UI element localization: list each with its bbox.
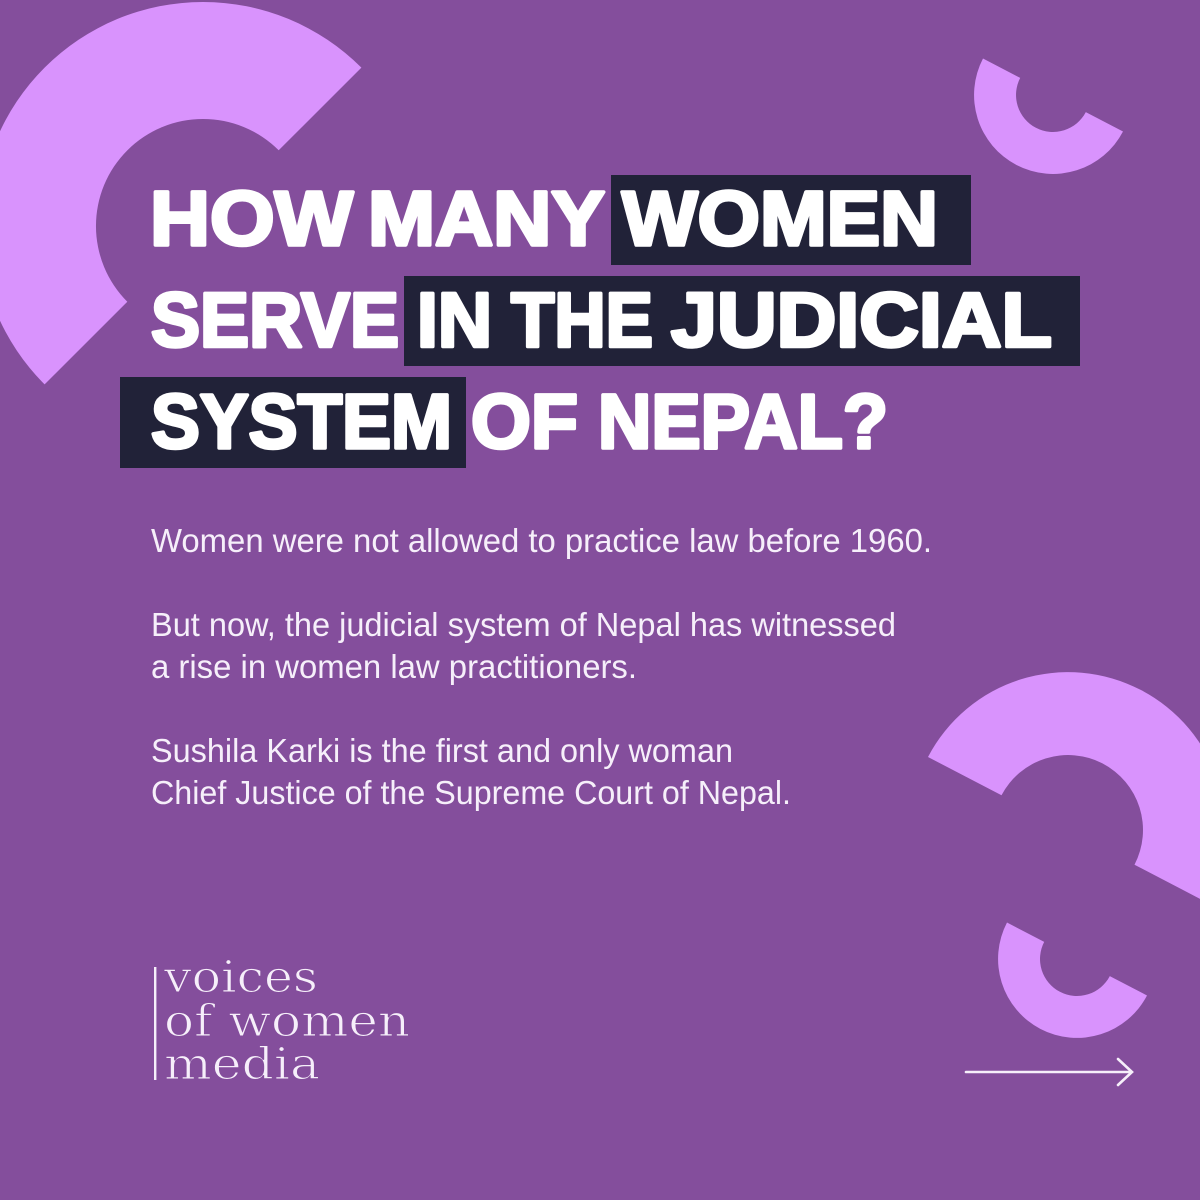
title	[120, 175, 1080, 468]
paragraph: Sushila Karki	[151, 732, 791, 811]
title line 2	[151, 278, 1052, 364]
logo: voices of women media	[154, 952, 410, 1090]
title line 3	[151, 379, 888, 465]
body text	[151, 522, 932, 811]
title line 1: WOMEN	[622, 176, 938, 262]
highlight: system	[120, 377, 466, 468]
shape: large arc right	[928, 672, 1200, 903]
title line 3: SYSTEM	[151, 379, 452, 465]
arrow	[966, 1059, 1132, 1085]
logo: voices of women media: voices	[163, 952, 318, 1003]
paragraph: rise in practitioners	[151, 606, 896, 685]
shape: small arc top right	[974, 58, 1123, 174]
paragraph: Sushila Karki: Sushila Karki is the first and only woman	[151, 732, 733, 769]
paragraph: before 1960: Women were not allowed to practice law before 1960.	[151, 522, 932, 559]
title line 2: THE	[511, 278, 653, 364]
highlight: in the judicial	[404, 276, 1080, 366]
title line 3: OF	[471, 379, 578, 465]
title line 1: MANY	[368, 176, 605, 262]
logo: voices of women media: media	[164, 1039, 320, 1090]
paragraph: rise in practitioners: a rise in women law practitioners.	[151, 648, 637, 685]
title line 1	[150, 176, 938, 262]
logo: voices of women media: of women	[164, 996, 410, 1047]
shape: large arc top left	[0, 2, 361, 384]
highlight: women	[611, 175, 971, 265]
title line 2: JUDICIAL	[671, 278, 1052, 364]
title line 3: NEPAL?	[598, 379, 888, 465]
title line 2: SERVE	[151, 278, 399, 364]
title line 1: HOW	[150, 176, 353, 262]
shape: small arc lower right	[998, 922, 1147, 1038]
paragraph: Sushila Karki: Chief Justice of the Supreme Court of Nepal.	[151, 774, 791, 811]
paragraph: rise in practitioners: But now, the judicial system of Nepal has witnessed	[151, 606, 896, 643]
title line 2: IN	[417, 278, 492, 364]
